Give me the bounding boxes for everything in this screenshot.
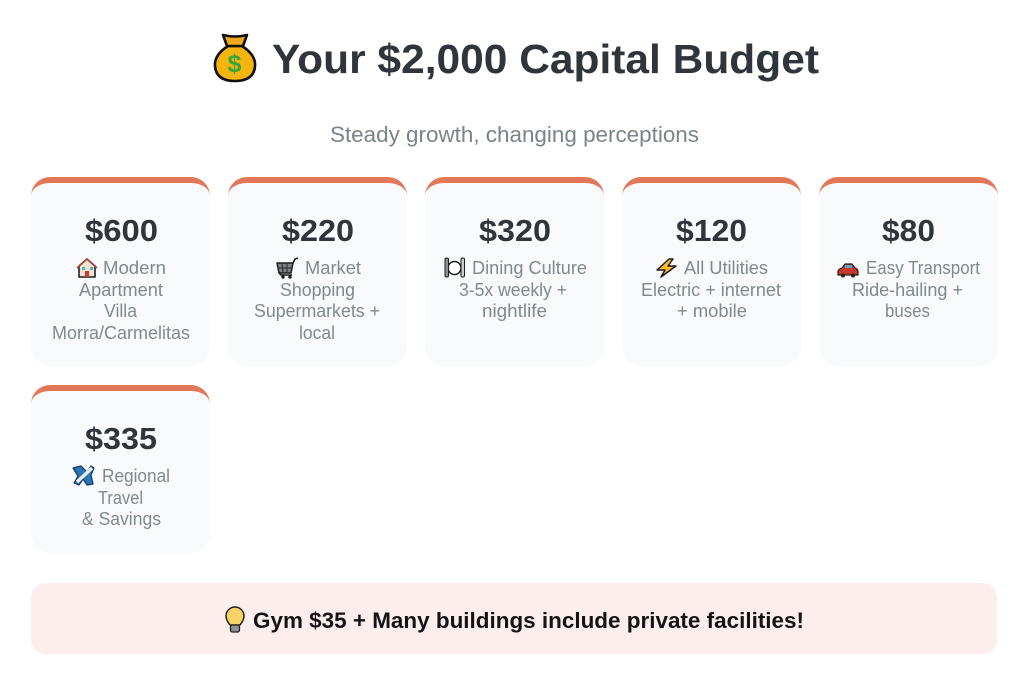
- icon: money bag: [215, 35, 255, 81]
- description: utilities: + mobile: [677, 300, 747, 321]
- description: dining: [459, 257, 587, 321]
- description: dining: nightlife: [482, 300, 547, 321]
- icon: cart: [277, 258, 298, 279]
- icon: lightning bolt: [657, 259, 676, 277]
- description: dining: Dining Culture: [472, 257, 587, 278]
- description: travel: Travel: [98, 487, 143, 508]
- icon: light bulb: [226, 607, 244, 632]
- panel: rent: [31, 177, 210, 366]
- amount: 220: $220: [282, 213, 354, 248]
- subtitle: Steady growth, changing perceptions: [330, 122, 699, 147]
- icon: money bag: $: [228, 50, 242, 78]
- panel: utilities: [622, 177, 801, 366]
- description: travel: Regional: [102, 465, 170, 486]
- amount: 80: $80: [882, 213, 935, 248]
- description: groceries: Market: [305, 257, 361, 278]
- description: rent: Morra/Carmelitas: [52, 322, 190, 343]
- description: utilities: Electric + internet: [641, 279, 781, 300]
- icon: airplane: [73, 466, 94, 485]
- description: rent: [52, 257, 190, 343]
- description: rent: Villa: [104, 300, 138, 321]
- description: transport: [852, 257, 980, 321]
- icon: plate and cutlery: [445, 258, 464, 277]
- callout text: Gym $35 + Many buildings include private facilities!: [253, 608, 804, 633]
- panel: transport: [819, 177, 998, 366]
- description: groceries: [254, 257, 380, 343]
- title: [215, 35, 819, 82]
- icon: car: [838, 264, 858, 278]
- description: transport: Easy Transport: [866, 257, 980, 278]
- description: transport: Ride-hailing +: [852, 279, 963, 300]
- description: groceries: Supermarkets +: [254, 300, 380, 321]
- description: groceries: Shopping: [280, 279, 355, 300]
- description: rent: Modern: [103, 257, 166, 278]
- description: dining: 3-5x weekly +: [459, 279, 567, 300]
- description: travel: [82, 465, 170, 529]
- description: utilities: All Utilities: [684, 257, 768, 278]
- amount: 120: $120: [676, 213, 747, 248]
- description: rent: Apartment: [79, 279, 163, 300]
- icon: house: [77, 259, 97, 277]
- amount: 320: $320: [479, 213, 551, 248]
- amount: 335: $335: [85, 421, 157, 456]
- description: utilities: [641, 257, 781, 321]
- description: groceries: local: [299, 322, 335, 343]
- title text: Your $2,000 Capital Budget: [272, 36, 819, 82]
- panel: dining: [425, 177, 604, 366]
- amount: 600: $600: [85, 213, 158, 248]
- description: transport: buses: [885, 300, 930, 321]
- callout: gym tip: [31, 583, 997, 654]
- panel: groceries: [228, 177, 407, 366]
- panel: travel and savings: [31, 385, 210, 553]
- description: travel: & Savings: [82, 508, 161, 529]
